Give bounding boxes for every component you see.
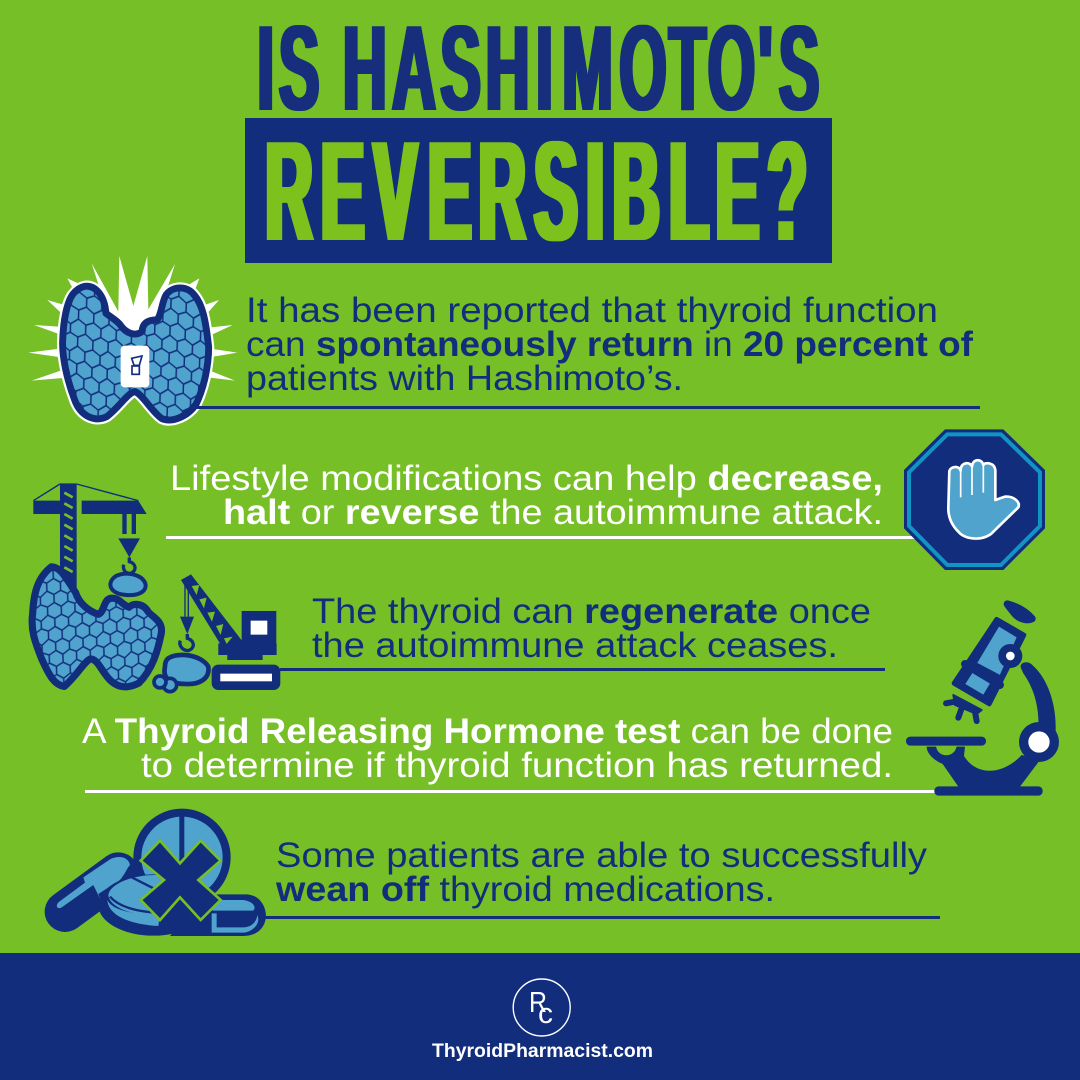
icon: stop sign with hand	[904, 429, 1045, 570]
text block 1: It has been reported that thyroid function	[246, 291, 938, 330]
capsule right	[170, 894, 266, 936]
rebuilt thyroid	[32, 567, 162, 687]
flat tablet	[98, 874, 208, 936]
logo: RC monogram: R	[529, 987, 547, 1019]
text block 1: patients with Hashimoto’s.	[246, 359, 683, 398]
tower crane	[33, 483, 147, 597]
text block 2: halt or reverse the autoimmune attack.	[223, 493, 883, 532]
text block 5: Some patients are able to successfully	[276, 836, 928, 875]
logo: RC monogram: c	[538, 998, 553, 1030]
text block 5	[265, 836, 940, 919]
crawler crane	[154, 574, 280, 692]
text block 3	[280, 592, 885, 671]
icon: thyroid with switch and starburst	[28, 256, 237, 420]
title banner: Reversible?: REVERSIBLE?	[265, 113, 807, 271]
title line: Is Hashimoto's: IS HASHIMOTO'S	[257, 1, 819, 137]
text block 4	[82, 712, 936, 793]
round tablet	[137, 813, 227, 902]
website address: ThyroidPharmacist.com	[432, 1040, 653, 1062]
icon: microscope	[906, 604, 1059, 796]
text block 1	[195, 291, 980, 409]
text block 5: wean off thyroid medications.	[275, 870, 775, 909]
logo: RC monogram	[513, 979, 570, 1036]
icon: pills crossed out	[57, 813, 266, 936]
text block 4: to determine if thyroid function has returned.	[141, 746, 893, 785]
green-outlined X	[141, 841, 221, 920]
capsule left	[57, 857, 130, 912]
text block 3: The thyroid can regenerate once	[312, 592, 871, 631]
text block 2	[166, 459, 921, 539]
text block 3: the autoimmune attack ceases.	[312, 626, 838, 665]
text block 2: Lifestyle modifications can help decrease,	[170, 459, 883, 498]
icon: construction cranes rebuilding thyroid	[32, 483, 280, 692]
text block 4: A Thyroid Releasing Hormone test can be done	[82, 712, 893, 751]
text block 1: can spontaneously return in 20 percent of	[246, 325, 973, 364]
footer band	[0, 953, 1080, 1080]
